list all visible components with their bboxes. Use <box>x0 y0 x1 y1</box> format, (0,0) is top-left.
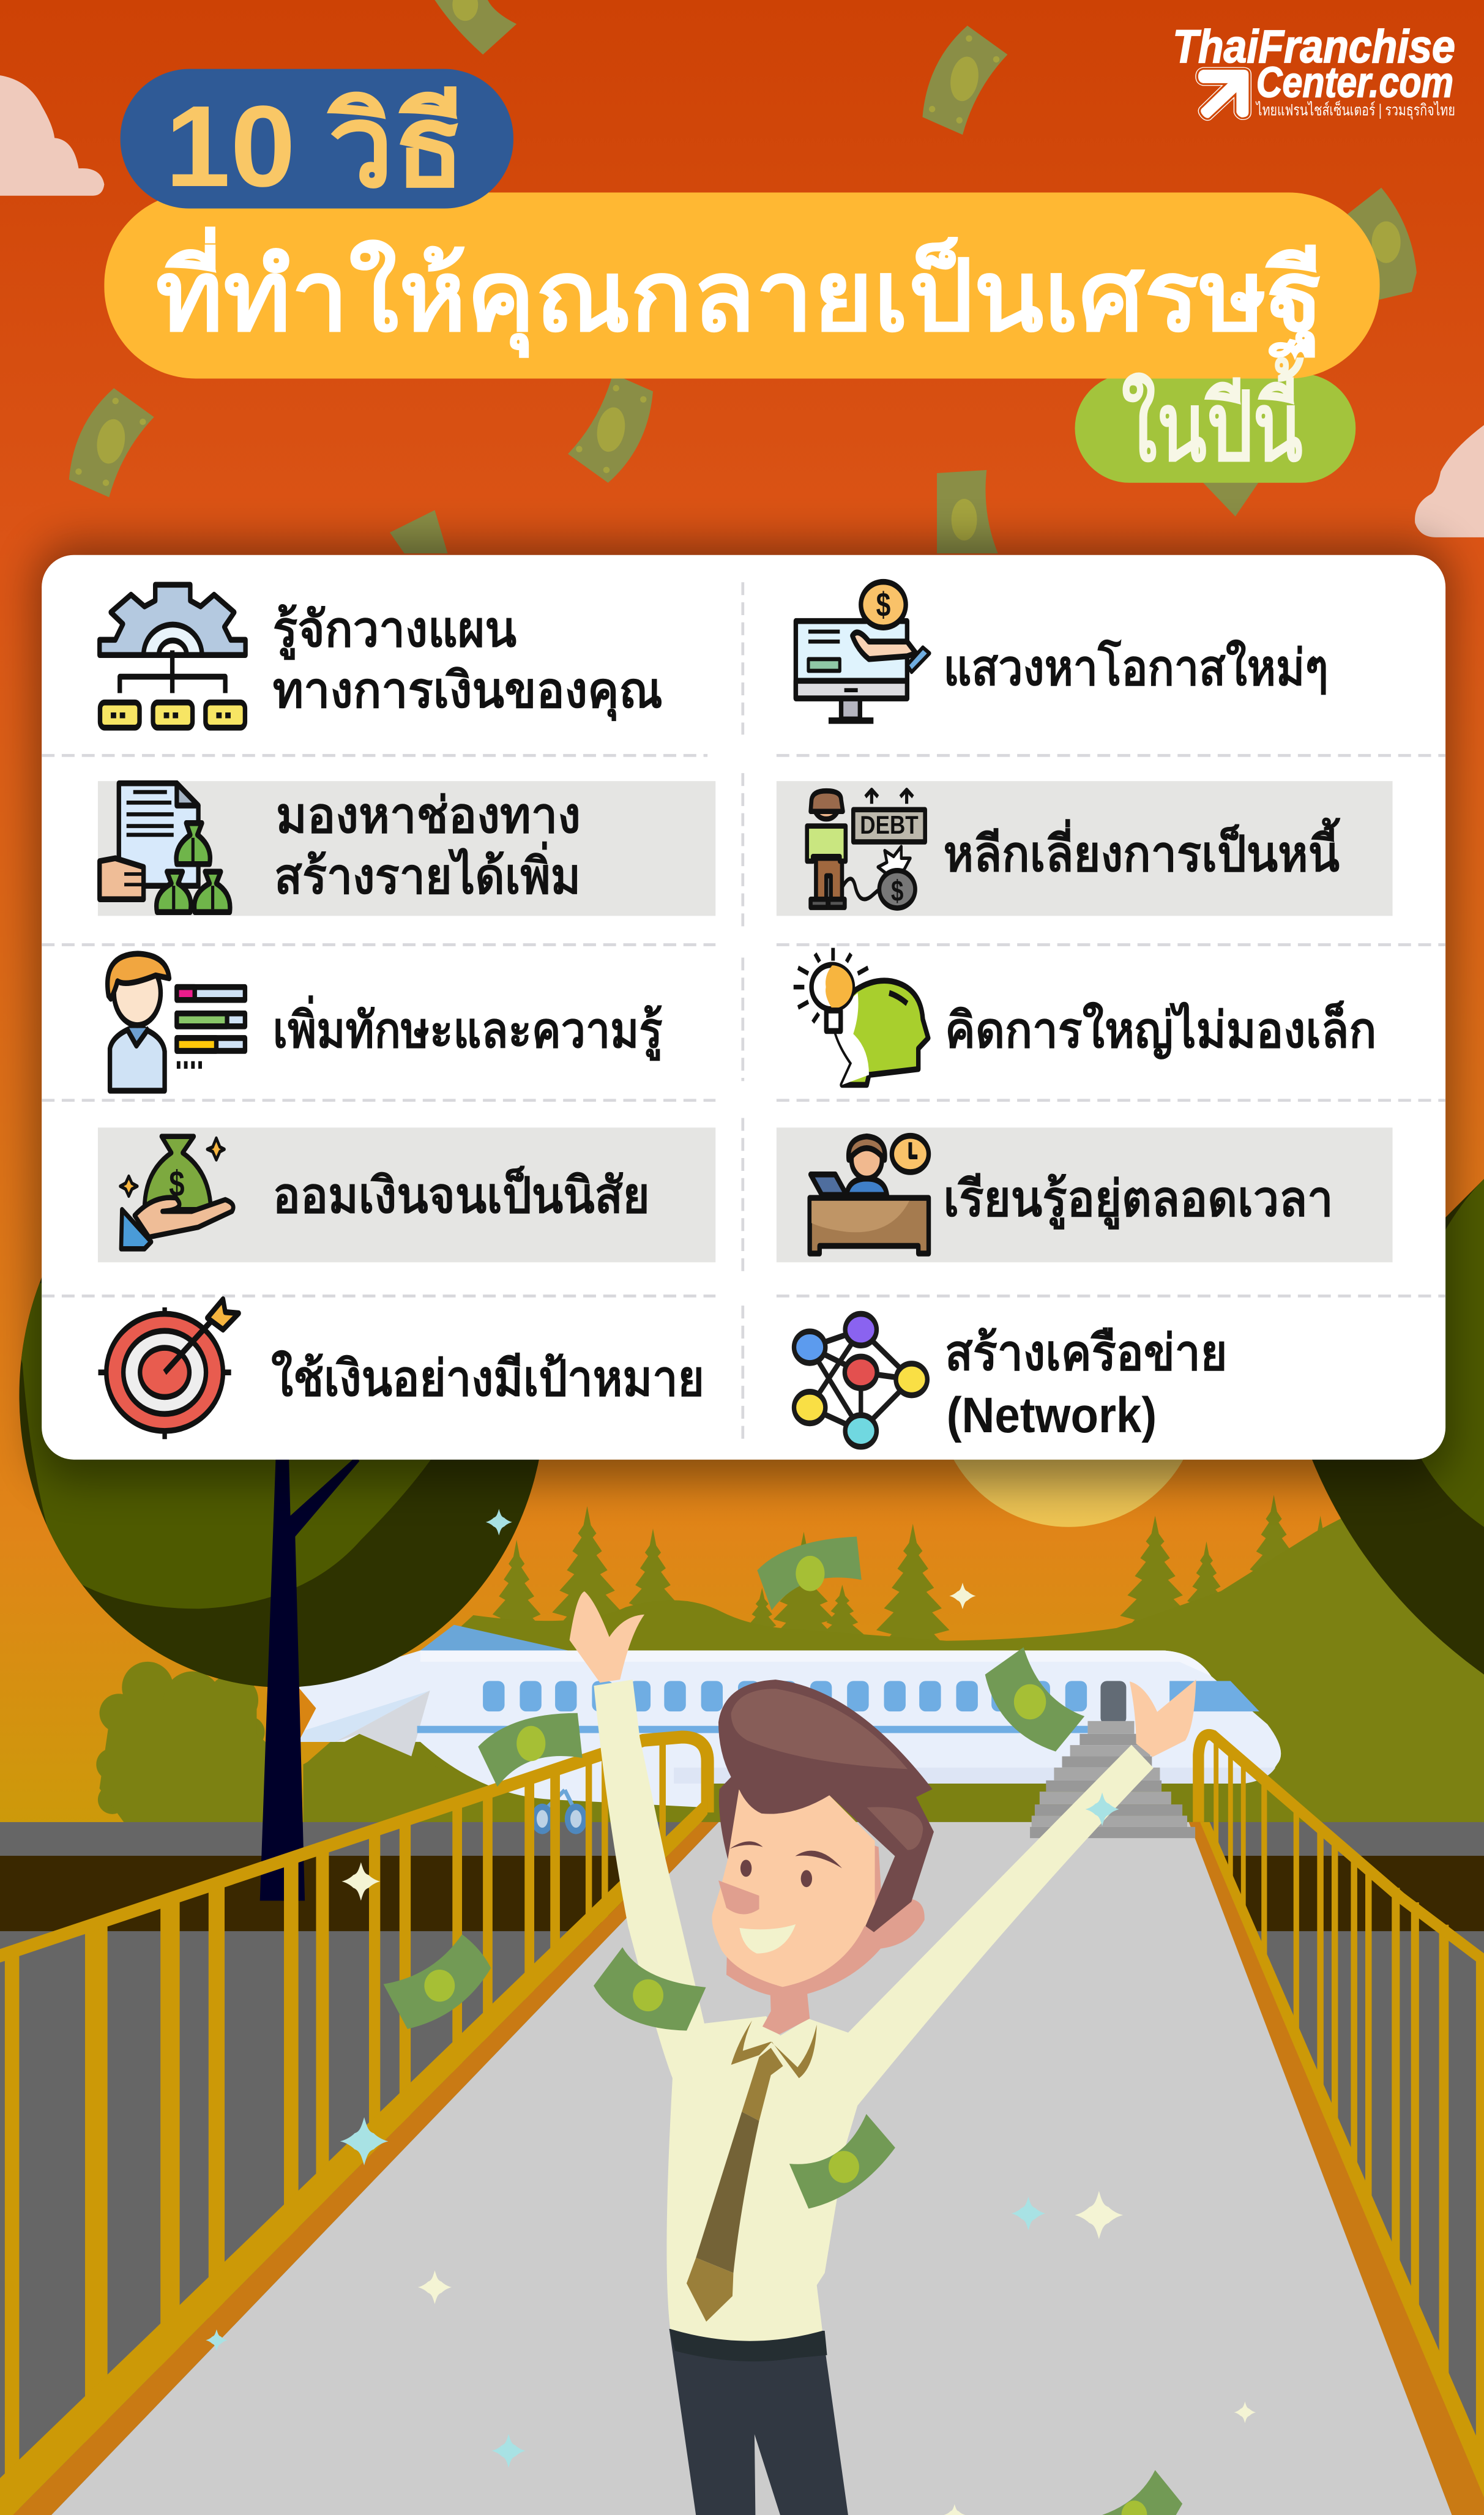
belt <box>669 2329 827 2361</box>
item 5 text: ใช้เงินอย่างมีเป้าหมาย <box>271 1350 704 1407</box>
left fence <box>0 1737 707 2515</box>
item 8 text: คิดการใหญ่ไม่มองเล็ก <box>945 1000 1376 1060</box>
icon: hand holding money bag <box>120 1137 233 1249</box>
item 4 text: ออมเงินจนเป็นนิสัย <box>273 1165 650 1224</box>
item 9 text: เรียนรู้อยู่ตลอดเวลา <box>944 1171 1333 1230</box>
icon: target with arrow <box>99 1299 239 1439</box>
item 2 text <box>274 788 581 905</box>
panel: ten ways card <box>42 555 1445 1460</box>
right hand <box>1130 1680 1196 1757</box>
ground bands <box>0 1822 1484 2515</box>
icon: gear with org chart <box>100 585 245 728</box>
title line: this year: ในปีนี้ <box>1122 356 1304 481</box>
walkway road <box>51 1822 1452 2515</box>
title pill: yellow: ที่ทำให้คุณกลายเป็นเศรษฐี <box>155 226 1324 361</box>
bush left <box>96 1662 276 1828</box>
icon: document and money bags <box>100 783 230 912</box>
item 10 text: สร้างเครือข่าย <box>945 1325 1228 1381</box>
cloud: left <box>0 75 104 196</box>
title pill: green <box>1075 374 1355 483</box>
icon: monitor with coin and hand <box>796 582 930 720</box>
icon: debt person with ball and chain: DEBT <box>860 810 919 839</box>
item 10 text <box>945 1325 1228 1443</box>
icon: head with light bulb <box>794 948 928 1085</box>
icon: debt person with ball and chain: $ <box>891 875 904 908</box>
item 10 text: (Network) <box>947 1388 1157 1443</box>
pine trees <box>486 1495 1348 1660</box>
item 1 text <box>273 602 663 722</box>
item 2 text: มองหาช่องทาง <box>276 788 581 843</box>
logo: ThaiFranchise <box>1173 21 1455 73</box>
left tree <box>19 1277 539 1901</box>
item 1 text: รู้จักวางแผน <box>273 602 516 660</box>
title pill: blue <box>121 69 513 211</box>
pants <box>669 2329 848 2515</box>
logo arrow <box>1199 70 1248 118</box>
hills <box>305 1443 1484 1828</box>
right fence <box>1198 1735 1484 2510</box>
icon: debt person with ball and chain <box>807 790 925 908</box>
falling money: top area <box>69 0 1417 553</box>
icon: monitor with coin and hand: $ <box>876 586 890 624</box>
left hand <box>570 1591 644 1683</box>
boarding stairs <box>1030 1721 1195 1838</box>
title pill: yellow <box>104 192 1380 378</box>
item 3 text: เพิ่มทักษะและความรู้ <box>273 995 663 1061</box>
hair highlight <box>731 1689 923 1850</box>
airplane landing gear <box>531 1790 587 1834</box>
icon: person at desk with clock <box>810 1136 929 1254</box>
icon: hand holding money bag: $ <box>169 1164 185 1205</box>
cloud: right <box>1415 425 1484 537</box>
title pill: blue: 10 วิธี <box>165 81 465 211</box>
card shadow <box>35 542 1452 1482</box>
shirt and arms <box>594 1680 1154 2341</box>
icon: network nodes <box>794 1314 927 1447</box>
item 1 text: ทางการเงินของคุณ <box>273 663 663 722</box>
tie <box>687 2020 817 2322</box>
sparkles <box>206 1509 1256 2515</box>
head <box>712 1680 934 1997</box>
sky background <box>0 0 1484 1828</box>
hair <box>718 1680 934 1932</box>
item 2 text: สร้างรายได้เพิ่ม <box>274 842 581 905</box>
item 7 text: หลีกเลี่ยงการเป็นหนี้ <box>944 817 1341 882</box>
icon: skills person and bars <box>108 954 245 1091</box>
airplane <box>299 1625 1281 1828</box>
man with raised arms <box>570 1591 1196 2515</box>
neck <box>763 1981 810 2035</box>
sun <box>937 1264 1200 1527</box>
right tree <box>1311 1179 1484 1675</box>
logo <box>1173 21 1455 120</box>
item 6 text: แสวงหาโอกาสใหม่ๆ <box>944 639 1329 696</box>
falling money: lower area <box>384 1536 1182 2515</box>
walkway edge strips <box>0 1796 1484 2515</box>
